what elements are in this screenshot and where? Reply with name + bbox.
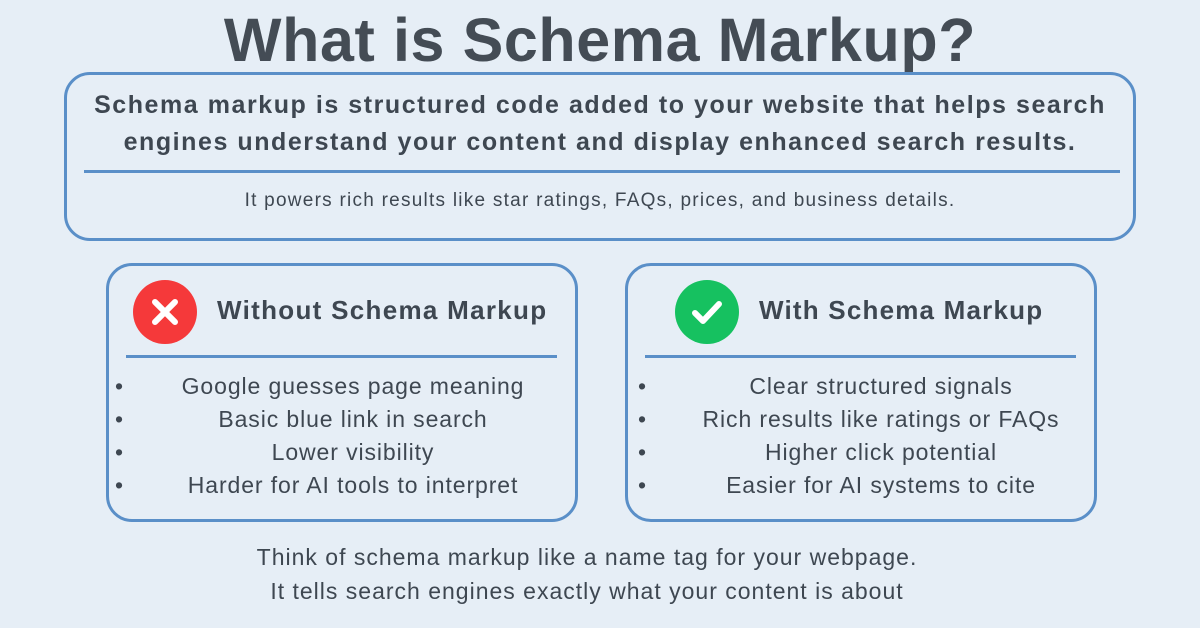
bullet list: Clear structured signals: [749, 373, 1013, 399]
panel: without schema: [106, 263, 578, 522]
bullet list: Basic blue link in search: [218, 406, 488, 432]
bullet list: Higher click potential: [765, 439, 997, 465]
subtext: It powers rich results like star ratings, FAQs, prices, and business details.: [245, 190, 955, 211]
bullet list: [638, 373, 1059, 498]
bullet list: Easier for AI systems to cite: [726, 472, 1036, 498]
footer text: Think of schema markup like a name tag for your webpage.: [257, 544, 917, 570]
definition text: Schema markup is structured code added to your website that helps search: [94, 91, 1106, 119]
bullet list: Lower visibility: [272, 439, 434, 465]
bullet list: Google guesses page meaning: [182, 373, 524, 399]
bullet list: •: [638, 373, 647, 399]
bullet list: •: [638, 406, 647, 432]
panel: definition: [64, 72, 1136, 241]
definition text: engines understand your content and display enhanced search results.: [124, 128, 1076, 156]
bullet list: Rich results like ratings or FAQs: [703, 406, 1059, 432]
bullet list: Harder for AI tools to interpret: [188, 472, 518, 498]
bullet list: •: [638, 472, 647, 498]
panel: with schema: [625, 263, 1097, 522]
title: What is Schema Markup?: [224, 6, 976, 74]
bullet list: •: [115, 439, 124, 465]
heading: With Schema Markup: [759, 295, 1043, 325]
icon: green check: [675, 280, 739, 344]
footer text: It tells search engines exactly what your content is about: [270, 578, 904, 604]
bullet list: [115, 373, 524, 498]
icon: red x: [133, 280, 197, 344]
heading: Without Schema Markup: [217, 295, 547, 325]
definition text: [94, 91, 1106, 156]
bullet list: •: [115, 373, 124, 399]
bullet list: •: [115, 406, 124, 432]
footer text: [257, 544, 917, 604]
bullet list: •: [638, 439, 647, 465]
bullet list: •: [115, 472, 124, 498]
